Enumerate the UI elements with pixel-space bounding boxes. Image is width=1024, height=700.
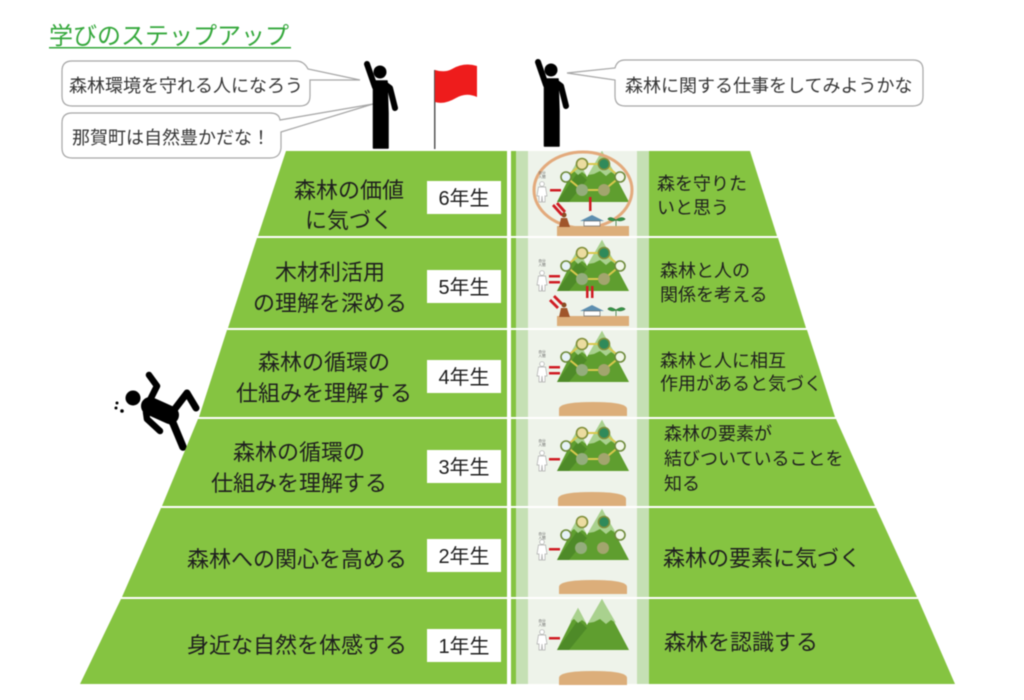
right band bbox=[649, 508, 917, 597]
outcome text bbox=[664, 424, 843, 494]
grade label: 6年生 bbox=[438, 187, 490, 210]
panel: 3年生 bbox=[162, 419, 875, 506]
icon: person with raised arm (left) bbox=[367, 64, 395, 148]
goal text: の理解を深める bbox=[253, 291, 407, 316]
outcome text bbox=[657, 174, 747, 218]
panel: 6年生 bbox=[258, 151, 777, 236]
left band bbox=[162, 419, 507, 506]
left band bbox=[199, 330, 507, 417]
panel: 4年生 bbox=[199, 330, 835, 417]
centre strips bbox=[511, 151, 649, 236]
illustration: forest and camp: 人間 bbox=[538, 262, 546, 267]
right band bbox=[649, 599, 955, 684]
goal text: 仕組みを理解する bbox=[236, 381, 412, 406]
outcome text: 作用があると気づく bbox=[660, 374, 822, 394]
grade label bbox=[427, 629, 501, 662]
callout: 那賀町 bbox=[62, 104, 373, 158]
illustration: forest and camp bbox=[537, 240, 629, 326]
outcome text: 森林の要素が bbox=[664, 424, 772, 444]
grade label: 1年生 bbox=[438, 635, 490, 658]
icon: red flag bbox=[434, 65, 477, 149]
outcome text: 関係を考える bbox=[660, 285, 767, 305]
right band bbox=[649, 419, 875, 506]
goal text: に気づく bbox=[305, 208, 393, 233]
outcome text: いと思う bbox=[657, 198, 729, 218]
panel: 5年生 bbox=[228, 238, 806, 328]
goal text: 森林の循環の bbox=[258, 350, 390, 375]
grade label bbox=[427, 270, 501, 303]
goal text: 森林への関心を高める bbox=[187, 547, 407, 572]
icon: falling person bbox=[114, 375, 196, 447]
illustration: mountain: 自分 bbox=[538, 618, 546, 623]
left band bbox=[228, 238, 507, 328]
illustration: forest: 自分 bbox=[538, 531, 546, 536]
goal text bbox=[294, 178, 404, 233]
goal text: 身近な自然を体感する bbox=[187, 633, 407, 658]
title: 学びのステップアップ bbox=[49, 23, 289, 50]
outcome text bbox=[660, 261, 767, 305]
grade label bbox=[427, 450, 501, 483]
right band bbox=[649, 238, 806, 328]
callout: 森林環境 bbox=[62, 61, 360, 106]
grade label bbox=[427, 181, 501, 214]
illustration: forest: 自分 bbox=[538, 438, 546, 443]
illustration: forest bbox=[537, 509, 629, 594]
outcome text: 知る bbox=[664, 474, 700, 494]
goal text bbox=[236, 350, 412, 406]
left band bbox=[80, 599, 507, 684]
outcome text: 森林と人に相互 bbox=[660, 351, 786, 371]
centre strips bbox=[511, 238, 649, 328]
right band bbox=[649, 151, 777, 236]
grade label: 2年生 bbox=[438, 545, 490, 568]
grade label bbox=[427, 539, 501, 572]
centre strips bbox=[511, 508, 649, 597]
illustration: forest: 人間 bbox=[538, 535, 546, 540]
illustration: mountain: 人間 bbox=[538, 622, 546, 627]
centre strips bbox=[511, 419, 649, 506]
illustration: forest bbox=[537, 420, 629, 506]
goal text: 木材利活用 bbox=[275, 260, 385, 285]
centre strips bbox=[511, 599, 649, 684]
illustration: forest and ring: 自分 bbox=[538, 170, 546, 175]
outcome text: 森を守りた bbox=[657, 174, 747, 194]
illustration: forest bbox=[537, 331, 629, 416]
outcome text bbox=[660, 351, 822, 394]
outcome text: 結びついていることを bbox=[664, 449, 843, 469]
illustration: mountain bbox=[537, 599, 629, 685]
goal text: 森林の価値 bbox=[294, 178, 404, 203]
illustration: forest and ring: 人間 bbox=[538, 174, 546, 179]
panel: 2年生 bbox=[122, 508, 917, 597]
outcome text: 森林の要素に気づく bbox=[663, 546, 861, 571]
outcome text: 森林と人の bbox=[660, 261, 750, 281]
illustration: forest: 人間 bbox=[538, 442, 546, 447]
illustration: forest and camp: 自分 bbox=[538, 258, 546, 263]
panel: 1年生 bbox=[80, 599, 955, 685]
illustration: forest: 人間 bbox=[538, 353, 546, 358]
left band bbox=[122, 508, 507, 597]
grade label: 4年生 bbox=[438, 366, 490, 389]
centre strips bbox=[511, 330, 649, 417]
callout: 森林環境: 森林環境を守れる人になろう bbox=[69, 76, 303, 96]
illustration: forest: 自分 bbox=[538, 349, 546, 354]
outcome text: 森林を認識する bbox=[664, 630, 818, 655]
right band bbox=[649, 330, 835, 417]
icon: person with raised arm (right) bbox=[538, 62, 566, 146]
goal text: 森林の循環の bbox=[233, 440, 365, 465]
callout: 那賀町: 那賀町は自然豊かだな！ bbox=[72, 128, 270, 148]
left band bbox=[258, 151, 507, 236]
grade label: 5年生 bbox=[438, 276, 490, 299]
illustration: forest and ring bbox=[534, 151, 632, 236]
callout: 森林に関する仕事 bbox=[567, 60, 923, 106]
goal text bbox=[211, 440, 387, 496]
goal text: 仕組みを理解する bbox=[211, 471, 387, 496]
grade label bbox=[427, 360, 501, 393]
goal text bbox=[253, 260, 407, 316]
callout: 森林に関する仕事: 森林に関する仕事をしてみようかな bbox=[625, 76, 912, 96]
grade label: 3年生 bbox=[438, 456, 490, 479]
